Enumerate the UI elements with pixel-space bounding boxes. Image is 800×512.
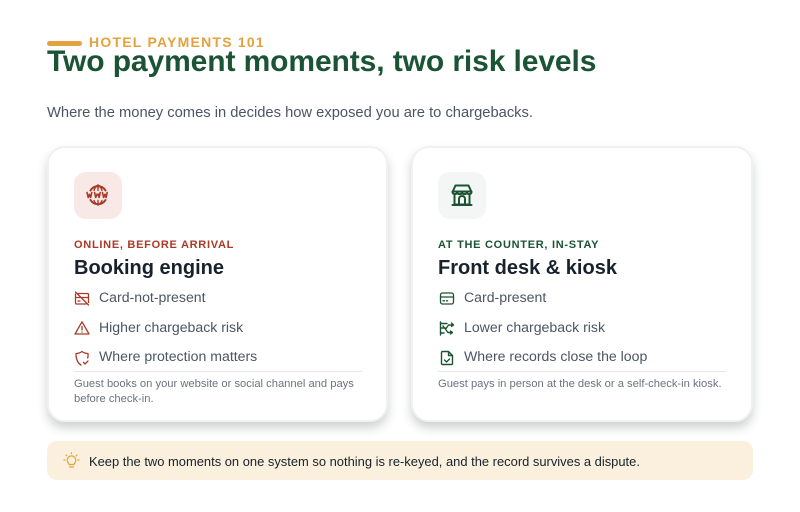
icon: light bulb <box>63 452 80 468</box>
feature text: Lower chargeback risk <box>464 319 605 335</box>
icon: credit card <box>440 292 454 305</box>
icon: www globe <box>86 184 108 206</box>
feature text: Card-not-present <box>99 289 206 305</box>
title: Two payment moments, two risk levels <box>47 45 596 78</box>
icon tile: www <box>74 172 122 219</box>
icon: warning <box>74 321 90 335</box>
card background <box>47 146 388 422</box>
panel: booking engine <box>42 146 392 432</box>
icon tile: store <box>438 172 486 219</box>
category label: AT THE COUNTER, IN-STAY <box>438 239 599 251</box>
subtitle: Where the money comes in decides how exposed you are to chargebacks. <box>47 105 533 121</box>
icon: storefront <box>452 184 472 206</box>
icon: transfer <box>440 321 454 336</box>
feature text: Where protection matters <box>99 348 257 364</box>
callout <box>47 441 753 480</box>
eyebrow accent bar <box>47 41 82 46</box>
footnote: before check-in. <box>74 393 154 405</box>
feature text: Where records close the loop <box>464 348 647 364</box>
panel: front desk and kiosk <box>406 146 758 432</box>
footnote <box>74 378 354 405</box>
eyebrow: HOTEL PAYMENTS 101 <box>89 34 265 50</box>
icon: file check <box>440 350 454 366</box>
callout text: Keep the two moments on one system so nothing is re-keyed, and the record survives a dispute. <box>89 454 640 468</box>
icon: shield <box>75 350 89 366</box>
footnote: Guest books on your website or social channel and pays <box>74 378 354 390</box>
category label: ONLINE, BEFORE ARRIVAL <box>74 239 234 251</box>
heading: Front desk & kiosk <box>438 257 617 279</box>
footnote: Guest pays in person at the desk or a self-check-in kiosk. <box>438 378 722 390</box>
heading: Booking engine <box>74 257 224 279</box>
icon: card off <box>74 291 90 306</box>
feature text: Higher chargeback risk <box>99 319 243 335</box>
card background <box>411 146 753 422</box>
feature text: Card-present <box>464 289 546 305</box>
